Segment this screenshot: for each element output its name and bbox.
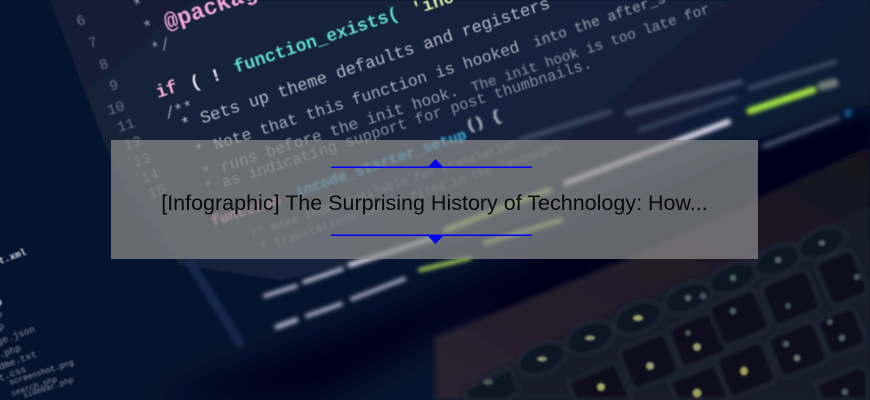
- code: line numbers: 8: [98, 57, 111, 75]
- code: sharp comment and function lines: * as indicating support for post thumbnails.: [202, 55, 594, 198]
- keyboard deck band: [435, 147, 870, 400]
- keyboard legends: [483, 240, 860, 398]
- code: function declaration behind the panel: /* make theme available for translation: [249, 137, 519, 242]
- code: sharp comment and function lines: * runs before the init hook.: [200, 83, 461, 183]
- keyboard keys: [464, 221, 870, 400]
- code: line numbers: 7: [87, 35, 100, 53]
- code: sharp comment and function lines: ( !: [188, 66, 225, 95]
- code: sharp comment and function lines: if: [154, 78, 180, 104]
- translucent title panel: [111, 140, 758, 259]
- code: function declaration behind the panel: * Translations can be filed in the languages: [259, 139, 563, 256]
- code: sharp comment and function lines: /**: [163, 98, 196, 124]
- file tree sidebar: screenshot.png: [8, 358, 75, 388]
- code: sharp comment and function lines: */: [149, 36, 173, 59]
- dark lower bezel: [160, 112, 870, 400]
- code: line numbers: 15: [147, 182, 168, 203]
- code: far end of comment lines: The init hook is too late for: [470, 2, 712, 97]
- laptop screen surface: [50, 0, 870, 280]
- code: line numbers: 12: [123, 134, 144, 155]
- code: line numbers: 9: [108, 78, 121, 96]
- code: line numbers: 13: [132, 151, 153, 172]
- code: sharp comment and function lines: [131, 0, 594, 198]
- code: line numbers: 6: [75, 13, 88, 31]
- code: sharp comment and function lines: *: [141, 17, 157, 40]
- file tree sidebar: [0, 247, 75, 400]
- code: function declaration behind the panel: function: [209, 192, 283, 231]
- code: sharp comment and function lines: * Note that this function is hooked: [193, 39, 522, 161]
- code: function declaration behind the panel: incode_starter_setup: [293, 127, 469, 202]
- blurred highlighted code bars: [190, 62, 852, 343]
- code: line numbers: 11: [116, 116, 137, 137]
- title: [Infographic] The Surprising History of Technology: How...: [161, 191, 708, 215]
- code: line numbers: 14: [140, 167, 161, 188]
- code: line numbers: 10: [106, 99, 127, 120]
- code: sharp comment and function lines: function_exists(: [232, 5, 402, 79]
- file tree sidebar: search.php: [10, 375, 59, 399]
- code: line numbers: [75, 13, 168, 203]
- code: function declaration behind the panel: () {: [464, 108, 504, 136]
- code: function declaration behind the panel: [209, 108, 563, 256]
